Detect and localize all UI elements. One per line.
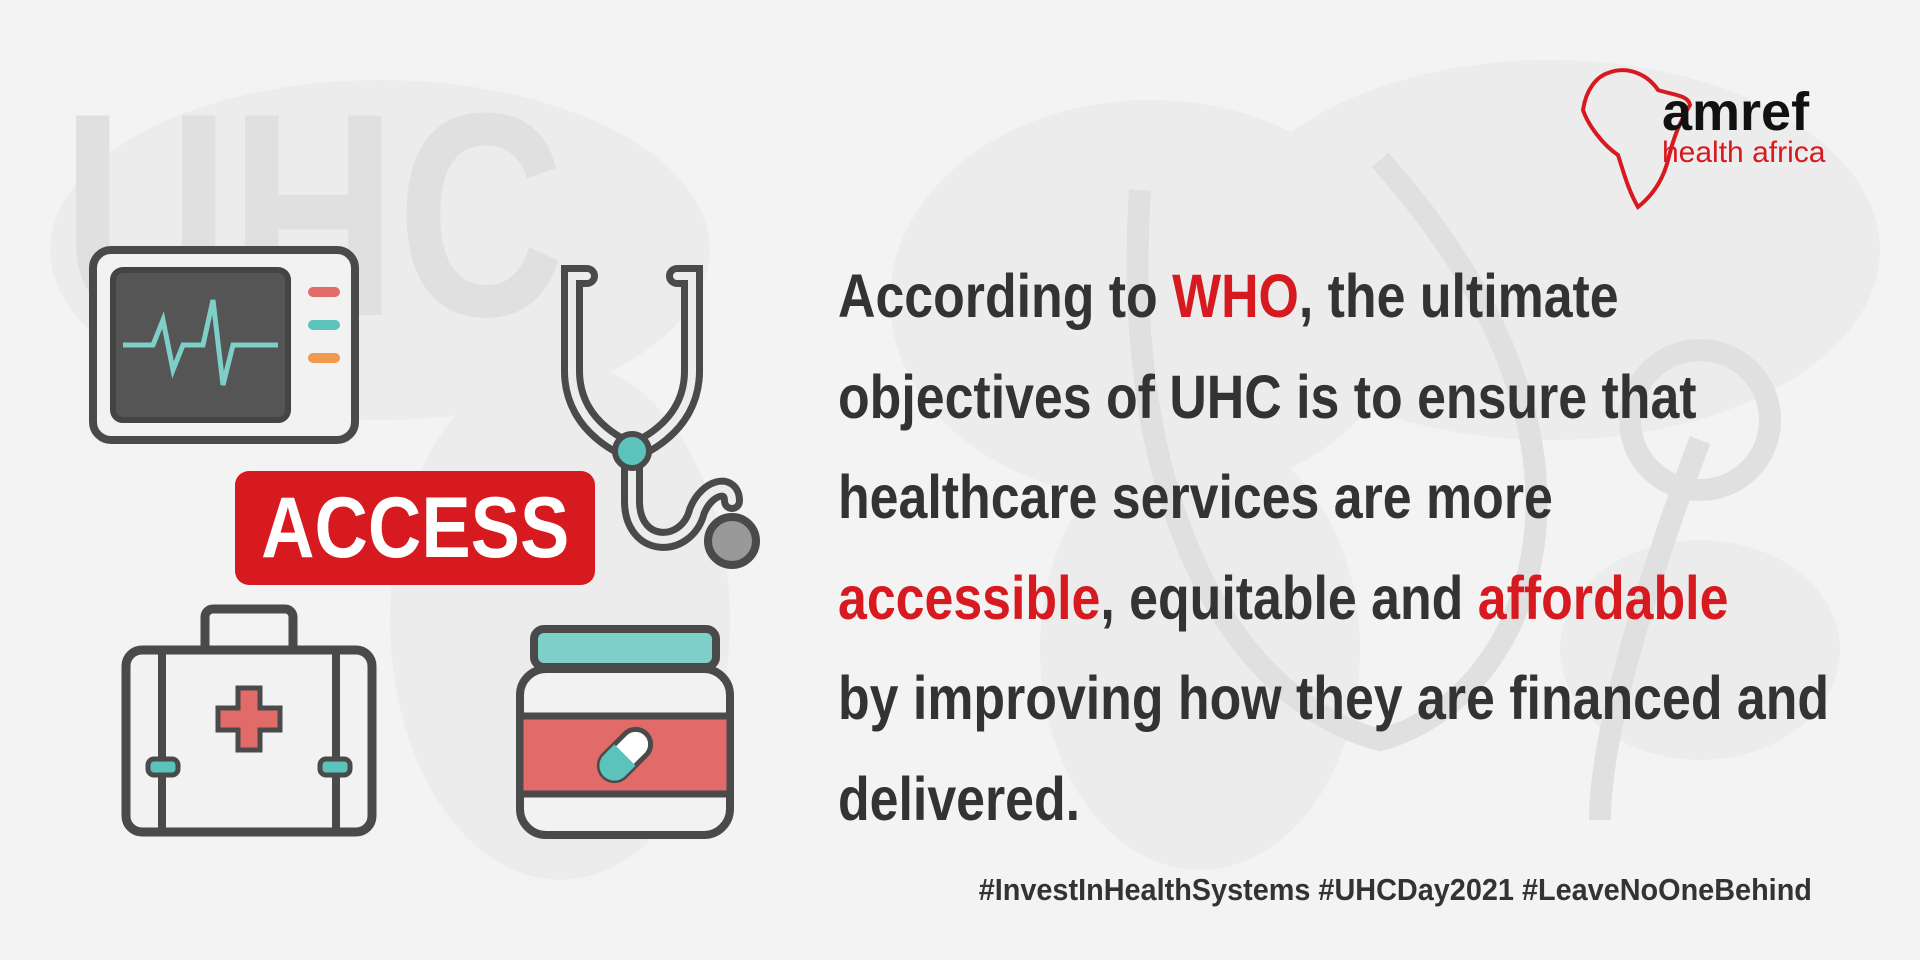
- background stethoscope faint: [1126, 153, 1781, 820]
- main text block: delivered.: [838, 764, 1080, 832]
- icon: pill jar: [516, 625, 734, 839]
- main text block: healthcare services are more: [838, 463, 1553, 531]
- main text block: by improving how they are financed and: [838, 664, 1829, 732]
- logo: amref health africa: [1580, 68, 1826, 210]
- main text block: According to WHO, the ultimate: [838, 262, 1619, 330]
- icon: stethoscope: [561, 265, 760, 569]
- logo: amref health africa: health africa: [1662, 136, 1825, 169]
- hashtags: #InvestInHealthSystems #UHCDay2021 #LeaveNoOneBehind: [979, 872, 1812, 907]
- icon: africa outline: [1580, 68, 1692, 210]
- icon: heart monitor: [89, 246, 359, 444]
- logo text: amref: [1662, 82, 1809, 142]
- icon: medical kit: [122, 604, 376, 836]
- main text block: objectives of UHC is to ensure that: [838, 362, 1697, 430]
- main text block: [838, 262, 1829, 832]
- background UHC letters: UHC: [62, 53, 565, 377]
- main text block: accessible, equitable and affordable: [838, 564, 1728, 632]
- ACCESS label: ACCESS: [261, 480, 569, 576]
